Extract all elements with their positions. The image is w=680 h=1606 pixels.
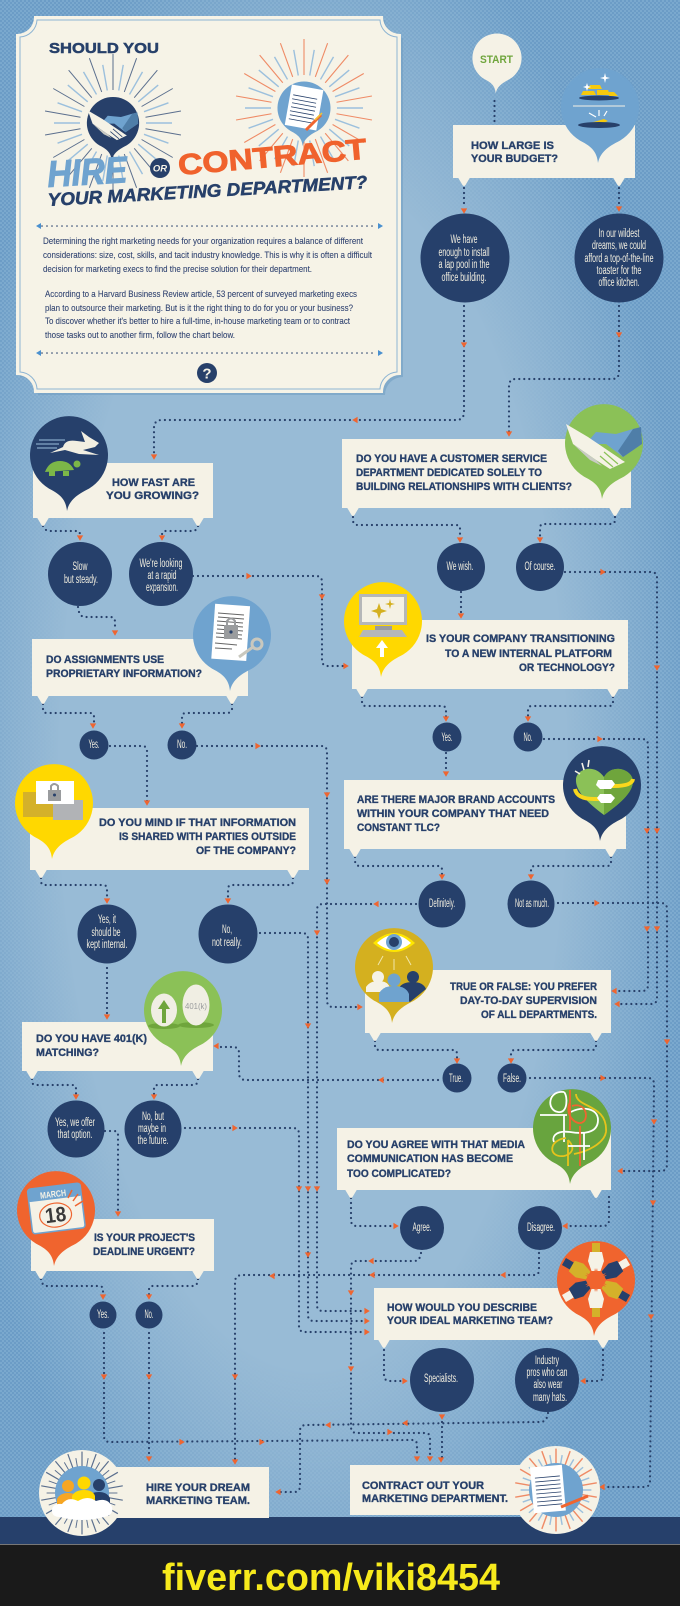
text [450, 981, 597, 1021]
question: ideal team [374, 1241, 635, 1348]
arrow: true to 401k [213, 1043, 438, 1083]
text: HOW LARGE IS [471, 140, 555, 152]
answer: rapid: expansion. [146, 582, 178, 594]
text: HOW FAST ARE [112, 477, 196, 489]
icon: eye over team [355, 928, 433, 1023]
text: WITHIN YOUR COMPANY THAT NEED [357, 808, 549, 820]
arrow: no platform to true or false [544, 736, 650, 994]
text [99, 817, 296, 857]
text [362, 1480, 508, 1505]
icon: calendar: MARCH [40, 1188, 67, 1201]
question: 401k [22, 971, 222, 1079]
answer: no proprietary: No. [177, 739, 187, 751]
text block: second paragraph: According to a Harvard Business Review article, 53 percent of surveyed marketing execs [45, 289, 357, 300]
start pin [472, 34, 522, 93]
text [106, 477, 199, 502]
question: brand accounts [344, 746, 641, 857]
text: DO YOU HAVE 401(K) [36, 1033, 147, 1045]
question: deadline [17, 1171, 214, 1279]
icon: gold bars budget [561, 68, 639, 163]
text: OR TECHNOLOGY? [519, 662, 615, 674]
text: OF ALL DEPARTMENTS. [481, 1009, 597, 1021]
answer: disagree: Disagree. [527, 1222, 555, 1234]
question: customer service [342, 404, 643, 516]
answer: definitely [418, 880, 466, 928]
arrow: offer option to deadline [105, 1131, 121, 1217]
answer: kept internal: kept internal. [86, 939, 128, 951]
text: TO A NEW INTERNAL PLATFORM [445, 648, 612, 660]
text: YOU GROWING? [106, 490, 199, 502]
answer: lap pool [420, 214, 510, 302]
text: MATCHING? [36, 1047, 99, 1059]
arrow: industry pros to hire [275, 1413, 548, 1495]
answer: no proprietary [168, 730, 196, 760]
text: IS SHARED WITH PARTIES OUTSIDE [119, 831, 296, 843]
question: true or false [355, 928, 611, 1041]
answer: rapid: We're looking [140, 558, 182, 570]
arrow: rabbit answers [43, 526, 198, 541]
arrow: kept internal to 401k [104, 968, 110, 1020]
heading: should you: SHOULD YOU [49, 40, 159, 57]
arrow: deadline no to hire [146, 1333, 152, 1462]
answer: toaster: office kitchen. [598, 277, 640, 289]
text: MARKETING TEAM. [146, 1495, 250, 1507]
text: CONTRACT OUT YOUR [362, 1480, 484, 1492]
arrow: rapid expansion to platform [193, 573, 349, 669]
text: MARKETING DEPARTMENT. [362, 1493, 508, 1505]
question: media [337, 1089, 611, 1198]
answer: kept internal: should be [92, 927, 120, 939]
text: ARE THERE MAJOR BRAND ACCOUNTS [357, 794, 555, 806]
text [146, 1482, 250, 1507]
answer: yes urgent: Yes. [97, 1309, 109, 1321]
text [357, 794, 555, 834]
answer: maybe in the future: maybe in [138, 1123, 166, 1135]
answer: yes proprietary: Yes. [88, 739, 100, 751]
arrow: 401k answers [32, 1079, 198, 1100]
answer: false: False. [503, 1073, 521, 1085]
question: mind sharing [15, 764, 309, 878]
text [356, 453, 572, 493]
text: DO YOU HAVE A CUSTOMER SERVICE [356, 453, 547, 465]
icon: calendar: 18 [44, 1203, 68, 1228]
arrow: false to contract [530, 1075, 657, 1490]
text block: second paragraph [45, 289, 357, 341]
heading: hire: HIRE [46, 149, 130, 195]
arrow: of course to true or false [565, 569, 660, 1007]
text: PROPRIETARY INFORMATION? [46, 668, 202, 680]
arrow: no not really to team [260, 933, 370, 1324]
text: TOO COMPLICATED? [347, 1168, 451, 1180]
answer: slow: but steady. [64, 574, 98, 586]
answer: yes urgent [90, 1302, 116, 1328]
question: proprietary [32, 596, 271, 704]
arrow: start to budget [493, 101, 496, 124]
answer: true: True. [449, 1073, 463, 1085]
icon: computer upgrade [344, 582, 422, 677]
text: YOUR BUDGET? [471, 153, 558, 165]
answer: rapid [129, 542, 193, 606]
answer: of course: Of course. [524, 561, 556, 573]
answer: true [442, 1064, 472, 1092]
answer: industry pros: pros who can [526, 1367, 568, 1379]
text [46, 654, 202, 680]
arrow: platform answers [362, 697, 613, 722]
text [471, 140, 558, 165]
answer: lap pool: a lap pool in the [438, 259, 490, 271]
arrow: toaster to customer service [506, 306, 622, 437]
arrow: agree to contract [348, 1253, 433, 1462]
heading: your marketing department: YOUR MARKETING DEPARTMENT? [47, 172, 368, 210]
answer: not really: not really. [212, 937, 242, 949]
answer: toaster: In our wildest [598, 228, 640, 240]
result: contract out [350, 1446, 605, 1534]
answer: we offer: that option. [58, 1129, 92, 1141]
answer: disagree [518, 1206, 562, 1250]
text [36, 1033, 147, 1059]
start pin: START [480, 54, 513, 66]
arrow: deadline yes to contract [101, 1333, 420, 1462]
answer: maybe in the future [124, 1100, 182, 1158]
footer band [0, 1517, 680, 1544]
arrow: disagree to hire [232, 1253, 539, 1465]
icon: hugged heart [563, 746, 641, 841]
answer: toaster: dreams, we could [592, 240, 646, 252]
arrow: mind sharing answers [41, 878, 293, 904]
icon: green handshake [565, 404, 643, 499]
text: DO YOU AGREE WITH THAT MEDIA [347, 1139, 525, 1151]
arrow: we wish to platform [458, 592, 464, 619]
text: HOW WOULD YOU DESCRIBE [387, 1302, 537, 1314]
text block: second paragraph: plan to outsource their marketing. But is it the right thing to do for you or your business? [45, 303, 353, 314]
icon: locked document and key [193, 596, 271, 691]
arrow: maybe in the future to team [185, 1125, 370, 1335]
arrow: budget to answers [461, 188, 622, 214]
answer: kept internal [78, 904, 136, 964]
text block: intro paragraph: decision for marketing execs to find the precise solution for their department. [43, 264, 312, 275]
answer: specialists [410, 1348, 474, 1412]
panel: title card [17, 17, 403, 395]
answer: of course [516, 543, 564, 591]
answer: maybe in the future: the future. [138, 1135, 168, 1147]
answer: maybe in the future: No, but [142, 1111, 164, 1123]
answer: industry pros: many hats. [533, 1392, 567, 1404]
arrow: no proprietary to true or false [197, 743, 363, 1010]
answer: specialists: Specialists. [424, 1373, 458, 1385]
text block: intro paragraph [43, 236, 372, 275]
answer: not as much [508, 880, 554, 928]
answer: lap pool: enough to install [438, 247, 490, 259]
answer: agree [400, 1206, 444, 1250]
arrow: team answers [384, 1350, 603, 1384]
badge: or: OR [153, 164, 167, 174]
question: platform [344, 582, 628, 697]
text: DO ASSIGNMENTS USE [46, 654, 164, 666]
answer: we offer: Yes, we offer [55, 1117, 95, 1129]
icon: calendar [17, 1171, 95, 1266]
arrow: yes to mind sharing [110, 746, 150, 806]
answer: slow [48, 542, 112, 606]
arrow: lap pool to growth [151, 306, 467, 460]
answer: false [498, 1064, 526, 1092]
answer: yes proprietary [80, 730, 108, 760]
text [387, 1302, 553, 1327]
answer: not really: No, [222, 924, 232, 936]
text: DO YOU MIND IF THAT INFORMATION [99, 817, 296, 829]
text: DEPARTMENT DEDICATED SOLELY TO [356, 467, 542, 479]
answer: yes platform: Yes. [442, 732, 452, 744]
answer: we offer [48, 1100, 104, 1158]
answer: industry pros: also wear [534, 1379, 563, 1391]
footer: fiverr credit [0, 1544, 680, 1606]
icon: rabbit and turtle [30, 416, 108, 511]
question: growth [30, 416, 213, 526]
text: YOUR IDEAL MARKETING TEAM? [387, 1315, 553, 1327]
icon: contract document burst [222, 35, 386, 181]
answer: not as much: Not as much. [515, 898, 549, 910]
icon: dream team [33, 1449, 131, 1537]
arrow: not as much to media [558, 900, 670, 1174]
heading: contract: CONTRACT [177, 134, 368, 182]
icon: contract document [507, 1446, 605, 1534]
arrow: deadline answers [41, 1279, 198, 1300]
text: IS YOUR COMPANY TRANSITIONING [426, 633, 615, 645]
answer: kept internal: Yes, it [98, 914, 116, 926]
arrow: definitely to team [314, 901, 416, 1314]
answer: not really [198, 904, 258, 964]
answer: no urgent [136, 1302, 162, 1328]
footer: fiverr credit: fiverr.com/viki8454 [162, 1557, 500, 1599]
answer: we wish: We wish. [446, 561, 474, 573]
icon: locked conversation [15, 764, 93, 859]
arrow: customer service answers [353, 517, 615, 543]
icon: hire handshake burst [31, 50, 195, 196]
text: COMMUNICATION HAS BECOME [347, 1153, 513, 1165]
icon: joined hands [557, 1241, 635, 1336]
question: budget [453, 68, 639, 186]
text block: second paragraph: those tasks out to another firm, follow the chart below. [45, 330, 235, 341]
icon: nest eggs: 401(k) [185, 1001, 207, 1011]
text: IS YOUR PROJECT'S [94, 1232, 195, 1244]
text block: intro paragraph: considerations: size, cost, skills, and tacit industry knowledge. This is why it is often a difficult [43, 250, 372, 261]
text block: second paragraph: To discover whether it's better to hire a full-time, in-house marketing team or to contract [45, 316, 350, 327]
arrow: slow to proprietary [78, 607, 118, 636]
text: DAY-TO-DAY SUPERVISION [460, 995, 597, 1007]
answer: yes platform [432, 722, 462, 752]
answer: rapid: at a rapid [148, 570, 176, 582]
answer: no urgent: No. [144, 1309, 154, 1321]
answer: we wish [437, 543, 485, 591]
icon: tangled lines [533, 1089, 611, 1184]
answer: toaster [574, 214, 664, 302]
text: OF THE COMPANY? [196, 845, 296, 857]
text: TRUE OR FALSE: YOU PREFER [450, 981, 597, 993]
answer: lap pool: office building. [442, 272, 486, 284]
text block: intro paragraph: Determining the right marketing needs for your organization requires a balance of different [43, 236, 363, 247]
arrow: media answers [351, 1197, 609, 1229]
answer: industry pros [515, 1348, 579, 1412]
text: DEADLINE URGENT? [93, 1246, 195, 1258]
text [426, 633, 615, 674]
icon: nest eggs [144, 971, 222, 1066]
badge: or [150, 158, 170, 178]
arrow: yes to brand accounts [443, 753, 449, 777]
arrow: proprietary answers [43, 704, 232, 729]
answer: definitely: Definitely. [429, 898, 455, 910]
arrow: brand answers [355, 857, 611, 880]
arrow: specialists to contract [438, 1414, 445, 1463]
text: HIRE YOUR DREAM [146, 1482, 250, 1494]
answer: slow: Slow [72, 561, 88, 573]
answer: agree: Agree. [412, 1222, 432, 1234]
answer: toaster: toaster for the [596, 265, 642, 277]
answer: no platform [514, 722, 542, 752]
text: BUILDING RELATIONSHIPS WITH CLIENTS? [356, 481, 572, 493]
result: hire your dream team [33, 1449, 269, 1537]
icon: question mark: ? [202, 366, 212, 382]
icon: question mark [197, 363, 217, 383]
arrow: true or false answers [375, 1041, 596, 1064]
text [347, 1139, 525, 1180]
text: CONSTANT TLC? [357, 822, 440, 834]
answer: industry pros: Industry [535, 1355, 559, 1367]
answer: lap pool: We have [450, 234, 478, 246]
text [93, 1232, 195, 1258]
answer: no platform: No. [524, 732, 532, 744]
